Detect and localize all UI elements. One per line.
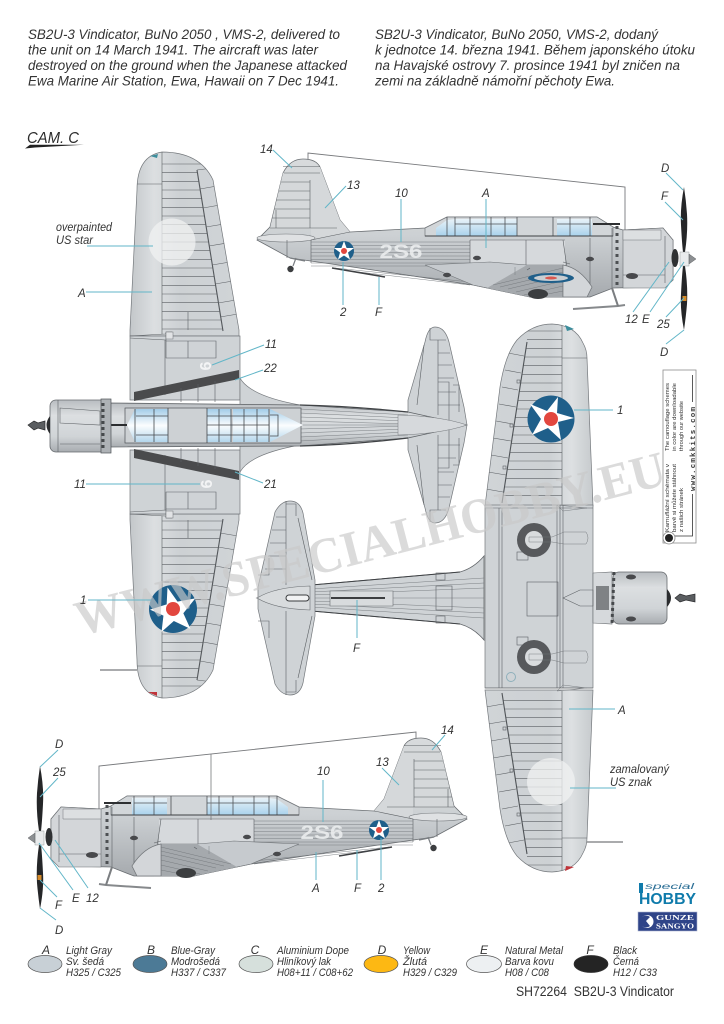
callout labels: upper side view: 2	[339, 307, 347, 319]
callout labels: upper side view	[260, 144, 670, 359]
callout labels: lower side view: E	[72, 893, 80, 905]
callout labels: lower side view: F	[354, 883, 362, 895]
wing number: top view upper: 6	[198, 361, 215, 370]
colour legend: F: Černá	[613, 955, 639, 968]
colour legend: A	[28, 943, 122, 979]
callout labels: upper side view: F	[661, 191, 669, 203]
info box: camouflage downloads	[663, 370, 698, 544]
info box: camouflage downloads: www.cmkkits.com	[690, 407, 698, 491]
callout labels: lower side view: A	[311, 883, 320, 895]
callout labels: top view: 11	[74, 479, 86, 491]
callout labels: upper side view: 10	[395, 188, 408, 200]
callout labels: top view: 22	[263, 363, 277, 375]
main wheel: lower	[517, 640, 588, 674]
description: Czech	[374, 26, 695, 88]
roundel: lower side view	[369, 820, 389, 840]
callout labels: top view: A	[77, 288, 86, 300]
callout labels: lower side view: 10	[317, 766, 330, 778]
info box: camouflage downloads: in color are downloadable	[672, 383, 678, 451]
wing number: top view lower: 6	[199, 479, 216, 488]
logo: gunze sangyo	[638, 912, 697, 931]
callout labels: bottom view: A	[617, 705, 626, 717]
colour legend: C: Aluminium Dope	[276, 945, 349, 957]
callout labels: upper side view: D	[661, 163, 669, 175]
colour legend: D: Žlutá	[402, 955, 427, 968]
info box: camouflage downloads: The camouflage schemes	[665, 383, 671, 451]
roundel: top view wing	[149, 585, 197, 633]
colour legend: C: H08+11 / C08+62	[277, 967, 353, 979]
product code footer: SH72264 SB2U-3 Vindicator	[516, 984, 674, 999]
description: English	[28, 26, 348, 88]
callout labels: lower side view: 25	[52, 767, 66, 779]
logo: special hobby	[639, 882, 696, 908]
colour legend: A: Sv. šedá	[66, 956, 104, 968]
colour legend: D: D	[378, 943, 387, 957]
callout labels: upper side view: 14	[260, 144, 273, 156]
main wheel: upper	[517, 523, 588, 557]
description: Czech: k jednotce 14. března 1941. Během japonského útoku	[375, 42, 695, 58]
heading: camouflage C: CAM. C	[27, 130, 79, 147]
bottom view aircraft	[257, 324, 695, 872]
callout labels: top view: 1	[80, 595, 86, 607]
colour legend: C: C	[251, 943, 260, 957]
fuselage: bottom view	[257, 556, 484, 640]
description: English: the unit on 14 March 1941. The aircraft was later	[28, 42, 319, 58]
fuselage: top view	[28, 399, 467, 453]
fuselage code: 2S6	[380, 242, 422, 263]
colour legend: B: Blue-Gray	[171, 945, 216, 957]
callout labels: bottom view: zamalovaný	[609, 764, 670, 776]
fuselage code: 2S6	[300, 823, 344, 844]
callout labels: bottom view: F	[353, 643, 361, 655]
callout labels: bottom view	[353, 405, 670, 789]
callout labels: lower side view: D	[55, 925, 63, 937]
colour legend: D: Yellow	[403, 945, 431, 957]
logo: special hobby: HOBBY	[639, 891, 696, 908]
callout labels: upper side view: D	[660, 347, 668, 359]
callout labels: upper side view: 25	[656, 319, 670, 331]
callout labels: bottom view: 1	[617, 405, 623, 417]
colour legend: B: H337 / C337	[171, 967, 227, 979]
colour legend: E: Natural Metal	[505, 945, 563, 957]
description: Czech: SB2U-3 Vindicator, BuNo 2050, VMS-2, dodaný	[375, 26, 659, 42]
watermark: WWW.SPECIALHOBBY.EU	[69, 440, 671, 647]
description: Czech: zemi na základně námořní pěchoty Ewa.	[374, 72, 615, 88]
colour legend: C	[239, 943, 353, 979]
colour legend: A: Light Gray	[66, 945, 113, 957]
logo: gunze sangyo: GUNZE	[656, 915, 695, 922]
callout labels: upper side view: F	[375, 307, 383, 319]
colour legend: F: Black	[613, 945, 637, 957]
callout labels: lower side view	[52, 725, 454, 937]
side view aircraft: lower	[28, 732, 467, 909]
info box: camouflage downloads: z našich stránek	[679, 488, 685, 532]
colour legend: E	[466, 943, 563, 979]
colour legend: A: A	[41, 943, 50, 957]
info box: camouflage downloads: barvě si můžete stáhnout	[671, 463, 678, 532]
description: English: Ewa Marine Air Station, Ewa, Hawaii on 7 Dec 1941.	[28, 72, 339, 88]
colour legend: B: Modrošedá	[171, 956, 220, 968]
colour legend: D	[364, 943, 457, 979]
top view aircraft	[28, 152, 467, 698]
roundel: upper side view	[334, 241, 354, 261]
wing roundel edge-on	[528, 273, 574, 283]
colour legend: E: Barva kovu	[505, 956, 554, 968]
callout labels: lower side view: D	[55, 739, 63, 751]
logo: special hobby: special	[645, 882, 694, 891]
colour legend: B: B	[147, 943, 155, 957]
callout labels: top view: US star	[56, 235, 94, 247]
side view aircraft: upper	[257, 153, 696, 330]
info box: camouflage downloads: through our website	[679, 401, 685, 451]
callout labels: upper side view: 12	[625, 314, 638, 326]
callout labels: lower side view: 14	[441, 725, 454, 737]
colour legend: F	[574, 943, 658, 979]
logo: gunze sangyo: SANGYO	[656, 924, 694, 930]
description: English: SB2U-3 Vindicator, BuNo 2050 , VMS-2, delivered to	[28, 26, 340, 42]
callout labels: top view	[56, 222, 277, 607]
callout labels: upper side view: 13	[347, 180, 360, 192]
callout labels: upper side view: A	[481, 188, 490, 200]
overpainted star: bottom view	[527, 758, 575, 806]
callout labels: lower side view: 12	[86, 893, 99, 905]
centre section: bottom view	[485, 505, 593, 691]
callout labels: lower side view: F	[55, 900, 63, 912]
leader lines	[39, 150, 684, 920]
callout labels: top view: 21	[263, 479, 277, 491]
description: Czech: na Havajské ostrovy 7. prosince 1941 byl zničen na	[375, 57, 680, 73]
colour legend: C: Hliníkový lak	[277, 956, 331, 968]
roundel: bottom view wing	[528, 396, 574, 442]
colour legend: A: H325 / C325	[66, 967, 122, 979]
engine: bottom view	[563, 572, 695, 624]
callout labels: upper side view: E	[642, 314, 650, 326]
callout labels: lower side view: 2	[377, 883, 385, 895]
description: English: destroyed on the ground when the Japanese attacked	[28, 57, 348, 73]
colour legend: F: H12 / C33	[613, 967, 658, 979]
horizontal tail: top view	[408, 327, 467, 523]
callout labels: top view: 11	[265, 339, 277, 351]
colour legend: E: H08 / C08	[505, 967, 550, 979]
colour legend: F: F	[586, 943, 594, 957]
callout labels: top view: overpainted	[56, 222, 113, 234]
overpainted star: top view	[148, 218, 196, 266]
colour legend: D: H329 / C329	[403, 967, 457, 979]
colour legend: E: E	[480, 943, 489, 957]
callout labels: lower side view: 13	[376, 757, 389, 769]
callout labels: bottom view: US znak	[610, 777, 653, 789]
info box: camouflage downloads: Kamuflážní schémata v	[665, 464, 671, 532]
horizontal tail: bottom view	[257, 501, 315, 695]
colour legend: B	[133, 943, 227, 979]
